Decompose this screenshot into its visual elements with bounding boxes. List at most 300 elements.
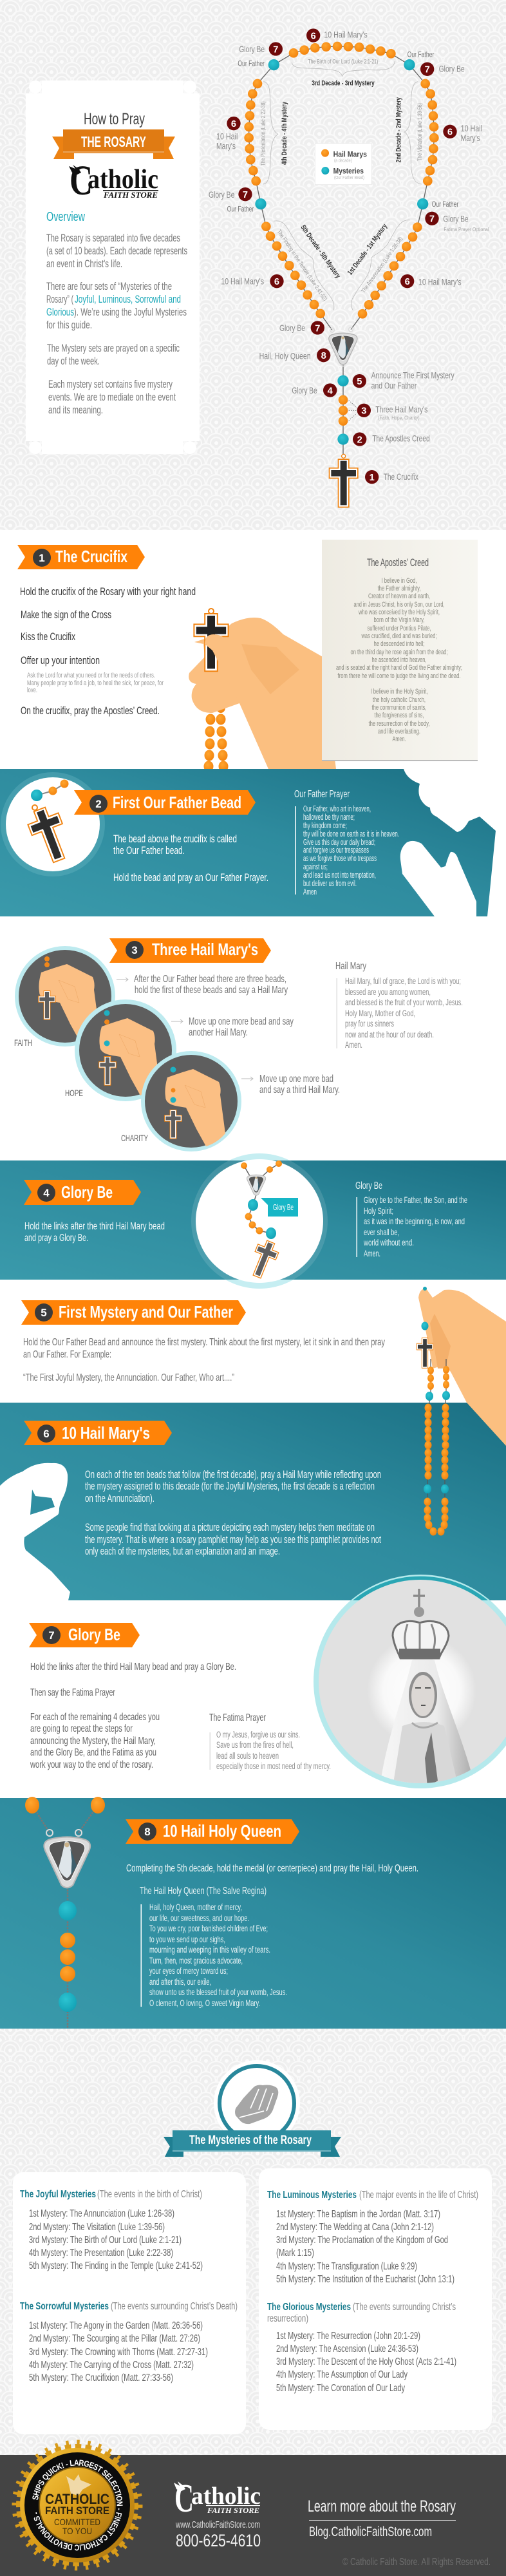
logo: Catholic Faith Store (white) [174, 2477, 261, 2521]
step labels and arrows: Move up one more bead and say [189, 1016, 294, 1027]
Joyful Mysteries list: 1st Mystery: The Annunciation (Luke 1:26-38) [29, 2208, 174, 2219]
banner: 8 [144, 1826, 151, 1838]
logo: Catholic Faith Store (white): C [174, 2477, 194, 2521]
ribbon: The Mysteries of the Rosary: The Mysteries of the Rosary [189, 2134, 312, 2147]
parchment: Apostles' Creed: the holy catholic Church, [373, 696, 426, 704]
Hail Mary prayer: pray for us sinners [345, 1019, 394, 1028]
marker numbers: 4 [328, 386, 333, 396]
parchment: Apostles' Creed: the forgiveness of sins, [375, 712, 424, 719]
dotted pointer lines [349, 401, 357, 421]
title: How to Pray: How to Pray [84, 110, 145, 128]
mystery labels: The Finding in the Temple (Luke 2:41-52) [276, 229, 328, 302]
logo: Catholic Faith Store (white): atholic [191, 2483, 261, 2510]
step labels and arrows: HOPE [65, 1088, 83, 1098]
Salve Regina prayer: our life, our sweetness, and our hope. [149, 1913, 249, 1923]
banner [24, 1421, 172, 1445]
Salve Regina prayer [140, 1886, 287, 2008]
Luminous Mysteries heading [267, 2190, 478, 2201]
parchment: Apostles' Creed: suffered under Pontius Pilate, [367, 625, 431, 632]
instructions [20, 585, 196, 717]
parchment: Apostles' Creed: he ascended into heaven, [372, 656, 426, 664]
silhouette: praying figure [0, 1463, 70, 1600]
instructions: Kiss the Crucifix [21, 630, 75, 643]
Sorrowful Mysteries list: 1st Mystery: The Agony in the Garden (Matt. 26:36-56) [29, 2320, 203, 2331]
overview text: The Mystery sets are prayed on a specific [47, 343, 180, 354]
Hail Mary prayer: Amen. [345, 1040, 362, 1050]
Luminous Mysteries list: 1st Mystery: The Baptism in the Jordan (Matt. 3:17) [276, 2209, 440, 2220]
diagram labels: Three Hail Mary's [375, 404, 427, 415]
Hail Mary prayer: Hail Mary [335, 961, 366, 972]
diagram labels: Our Father [227, 205, 254, 213]
palm shading [241, 644, 299, 694]
Glorious Mysteries heading: resurrection) [267, 2313, 308, 2324]
Salve Regina prayer: and after this, our exile, [149, 1977, 211, 1987]
Luminous Mysteries list: (Mark 1:15) [276, 2248, 314, 2259]
circle: Faith hand [15, 946, 115, 1046]
circle: Hope hand [75, 999, 176, 1101]
diagram labels: Glory Be [439, 64, 465, 74]
parchment: Apostles' Creed: was crucified, died and was buried; [361, 632, 436, 640]
instructions: Ask the Lord for what you need or for the needs of others. [27, 672, 155, 679]
hand holding crucifix: palm [189, 618, 336, 769]
section 6: 10 Hail Mary's [0, 1421, 381, 1600]
banner [17, 545, 145, 569]
instructions: the Our Father bead. [113, 845, 185, 857]
ribbon: The Mysteries of the Rosary [164, 2130, 341, 2157]
diagram labels: 10 Hail Mary's [418, 276, 462, 287]
Our Father prayer: Amen [303, 887, 317, 896]
overview text: Glorious [46, 307, 74, 318]
banner: Glory Be [68, 1625, 120, 1644]
Sorrowful Mysteries heading: The Sorrowful Mysteries [20, 2301, 109, 2312]
marker numbers: 5 [357, 377, 362, 387]
banner: First Our Father Bead [113, 793, 241, 812]
mystery labels: The Annunciation (Luke 1:26-38) [360, 236, 404, 294]
banner: 10 Hail Mary's [62, 1423, 150, 1443]
Sorrowful Mysteries list: 2nd Mystery: The Scourging at the Pillar (Matt. 27:26) [29, 2333, 200, 2344]
banner [74, 790, 256, 815]
Salve Regina prayer: mourning and weeping in this valley of tears. [149, 1945, 270, 1955]
step labels and arrows: After the Our Father bead there are three beads, [134, 974, 286, 985]
banner [29, 1623, 140, 1647]
instructions: For each of the remaining 4 decades you [30, 1712, 160, 1723]
Our Father prayer: Our Father, who art in heaven, [303, 804, 371, 813]
Joyful Mysteries list [29, 2208, 203, 2271]
reflection text: only each of the mysteries, but an explanation and an image. [85, 1546, 280, 1557]
decade labels: 3rd Decade - 3rd Mystery [312, 80, 375, 88]
diagram labels: The Apostles Creed [372, 433, 430, 444]
Glory Be prayer: as it was in the beginning, is now, and [364, 1217, 465, 1226]
Sorrowful Mysteries heading [20, 2301, 238, 2312]
mystery labels: The Presentation (Luke 2:22-38) [259, 101, 266, 166]
diagram labels: Mary's [216, 141, 236, 151]
section 8: Hail Holy Queen [0, 1797, 506, 2029]
Glorious Mysteries list: 5th Mystery: The Coronation of Our Lady [276, 2383, 405, 2394]
marker numbers: 8 [321, 351, 326, 361]
parchment: Apostles' Creed: Creator of heaven and earth, [368, 592, 430, 600]
seal: Committed to You: FAITH STORE [45, 2505, 109, 2517]
instructions [23, 1337, 385, 1383]
numbered markers [227, 28, 457, 484]
Glory Be prayer [355, 1180, 467, 1258]
banner: Glory Be [61, 1182, 113, 1202]
diagram labels: Our Father [432, 200, 458, 209]
instructions: love. [27, 687, 37, 694]
Luminous Mysteries list [276, 2209, 454, 2285]
decade labels: 1st Decade - 1st Mystery [346, 222, 389, 276]
banner: Three Hail Mary's [152, 940, 258, 959]
instructions: On the crucifix, pray the Apostles’ Creed. [21, 705, 160, 717]
section 1: The Crucifix [17, 540, 478, 772]
instructions: “The First Joyful Mystery, the Annunciation. Our Father, Who art....” [23, 1372, 234, 1383]
banner [21, 1300, 246, 1325]
banner [126, 1819, 299, 1844]
crucifix in hand [193, 609, 229, 672]
Sorrowful Mysteries heading: (The events surrounding Christ’s Death) [111, 2301, 238, 2312]
medallion: Glory Be bead [191, 1153, 328, 1289]
mystery labels [259, 59, 423, 302]
reflection text [85, 1469, 381, 1557]
mystery beads [255, 59, 428, 445]
Joyful Mysteries heading: (The events in the birth of Christ) [97, 2189, 202, 2200]
diagram labels: Fatima Prayer Optional [444, 226, 489, 232]
Salve Regina prayer: To you we cry, poor banished children of Eve; [149, 1924, 268, 1933]
Glorious Mysteries list: 1st Mystery: The Resurrection (John 20:1-29) [276, 2331, 420, 2342]
Joyful Mysteries list: 5th Mystery: The Finding in the Temple (Luke 2:41-52) [29, 2260, 203, 2271]
centerpiece medal [329, 333, 357, 365]
panel: Luminous and Glorious Mysteries [259, 2168, 492, 2430]
marker numbers: 7 [425, 65, 430, 75]
ribbon: The Rosary [52, 129, 175, 159]
marker numbers: 6 [405, 277, 410, 287]
Glory Be prayer: Holy Spirit; [364, 1206, 393, 1216]
banner: The Crucifix [55, 547, 127, 566]
instructions: an Our Father. For Example: [23, 1349, 111, 1360]
Glorious Mysteries list: 4th Mystery: The Assumption of Our Lady [276, 2369, 408, 2380]
Our Father prayer: against us; [303, 862, 328, 871]
hand holding rosary [417, 1287, 506, 1535]
teal band [0, 1160, 506, 1280]
instructions: announcing the Mystery, the Hail Mary, [30, 1736, 156, 1747]
Luminous Mysteries list: 4th Mystery: The Transfiguration (Luke 9:29) [276, 2261, 417, 2272]
parchment: Apostles' Creed: I believe in the Holy Spirit, [371, 688, 427, 696]
banner [109, 938, 271, 963]
parchment: Apostles' Creed: and life everlasting. [378, 728, 420, 735]
seal: Committed to You: SHIPS QUICK! - LARGEST SELECTION - FINEST CATHOLIC DEVOTIONALS - [32, 2460, 123, 2550]
ribbon: The Rosary: THE ROSARY [81, 133, 146, 150]
blog link: Blog.CatholicFaithStore.com [309, 2524, 432, 2539]
diagram labels: 10 Hail Mary's [221, 276, 264, 287]
Salve Regina prayer: to you we send up our sighs, [149, 1935, 225, 1944]
top patterned background [0, 0, 506, 530]
banner: 2 [95, 798, 102, 810]
section 6 band [0, 1403, 506, 1600]
callout: Glory Be: Glory Be [273, 1202, 294, 1212]
overview text: Joyful, Luminous, Sorrowful and [75, 294, 181, 305]
diagram labels [209, 29, 489, 482]
marker numbers: 7 [315, 323, 320, 334]
Our Father prayer: Give us this day our daily bread; [303, 838, 375, 847]
instructions: Many people pray to find a job, to heal the sick, for peace, for [27, 679, 164, 687]
overview text: events. We are to mediate on the event [48, 392, 176, 403]
mystery labels: The Birth of Our Lord (Luke 2:1-21) [308, 59, 378, 65]
Fatima prayer: O my Jesus, forgive us our sins. [216, 1730, 300, 1739]
Hail Mary prayer: Holy Mary, Mother of God, [345, 1009, 415, 1018]
diagram labels: Glory Be [209, 189, 234, 200]
marker numbers: 6 [447, 128, 453, 138]
finger shade [430, 1314, 451, 1368]
marker numbers: 6 [231, 119, 236, 129]
parchment: Apostles' Creed: born of the Virgin Mary, [373, 616, 425, 624]
logo: Catholic Faith Store: atholic [88, 165, 158, 194]
diagram labels: Our Father [408, 50, 434, 59]
rosary centerpiece and beads [25, 1797, 105, 2029]
Luminous Mysteries heading: The Luminous Mysteries [267, 2190, 357, 2201]
diagram labels: 10 Hail [461, 123, 482, 133]
Salve Regina prayer: show unto us the blessed fruit of your womb, Jesus. [149, 1987, 287, 1997]
overview text: There are four sets of “Mysteries of the [46, 281, 172, 292]
banner: 4 [43, 1187, 50, 1199]
logo: Catholic Faith Store: C [70, 157, 93, 204]
teal band with praying silhouette cut-out [0, 769, 496, 916]
decade labels [281, 80, 402, 280]
marker numbers: 6 [274, 277, 279, 287]
Joyful Mysteries heading [20, 2189, 202, 2200]
diagram labels: and Our Father [371, 381, 417, 391]
marker numbers: 7 [429, 214, 435, 225]
Our Father prayer [294, 789, 399, 896]
phone: 800-625-4610 [176, 2531, 261, 2550]
banner: 6 [43, 1428, 50, 1440]
Hail Mary prayer: now and at the hour of our death. [345, 1030, 434, 1039]
section 4: Glory Be [0, 1153, 506, 1289]
hand [418, 1289, 506, 1446]
instructions: Hold the links after the third Hail Mary bead [24, 1221, 165, 1232]
crucifix [329, 454, 359, 507]
mystery labels: The Visitation (Luke 1:39-56) [417, 103, 423, 161]
Hail Mary prayer [335, 961, 463, 1050]
overview text: Rosary” ( [46, 294, 73, 305]
silhouette gap between arm and body [30, 1490, 55, 1515]
teal band [0, 1798, 506, 2029]
Salve Regina prayer: O clement, O loving, O sweet Virgin Mary. [149, 1998, 260, 2008]
panel: Joyful and Sorrowful Mysteries [13, 2172, 246, 2434]
instructions: Make the sign of the Cross [21, 609, 111, 621]
hanging rosary strands [417, 1321, 450, 1535]
legend [315, 144, 371, 185]
parchment: Apostles' Creed: and in Jesus Christ, his only Son, our Lord, [354, 601, 444, 609]
parchment: Apostles' Creed: Amen. [393, 735, 406, 743]
step labels and arrows [14, 974, 340, 1143]
step labels and arrows: FAITH [14, 1037, 32, 1048]
overview text: and its meaning. [48, 404, 103, 416]
marker numbers: 3 [361, 406, 366, 417]
diagram labels: Glory Be [443, 213, 469, 223]
decade labels: 4th Decade - 4th Mystery [281, 101, 288, 165]
footer [0, 2439, 506, 2576]
parchment: Apostles' Creed: I believe in God, [381, 577, 417, 585]
diagram labels: Mary's [461, 133, 480, 143]
parchment: Apostles' Creed: on the third day he rose again from the dead; [350, 649, 448, 656]
marker numbers: 7 [243, 190, 248, 200]
logo: Catholic Faith Store [69, 157, 158, 204]
medallion: first bead [1, 772, 105, 876]
Sorrowful Mysteries list: 5th Mystery: The Crucifixion (Matt. 27:33-56) [29, 2372, 173, 2383]
parchment: Apostles' Creed: The Apostles’ Creed [367, 556, 429, 569]
Our Father prayer: but deliver us from evil. [303, 879, 357, 888]
Hail Mary beads [244, 42, 439, 426]
marker numbers [231, 31, 453, 483]
banner [24, 1180, 141, 1205]
instructions: Hold the links after the third Hail Mary bead and pray a Glory Be. [30, 1662, 236, 1672]
logo: Catholic Faith Store (white): FAITH STORE [207, 2506, 259, 2515]
medallion: statue of Our Lady of Fatima [314, 1575, 506, 1788]
diagram labels: Glory Be [292, 385, 317, 395]
Fatima prayer: lead all souls to heaven [216, 1751, 279, 1761]
instructions: and pray a Glory Be. [24, 1233, 88, 1244]
instructions: Hold the bead and pray an Our Father Prayer. [113, 872, 268, 884]
instructions: Hold the crucifix of the Rosary with your right hand [20, 585, 196, 598]
Fatima prayer: Save us from the fires of hell, [216, 1740, 294, 1750]
legend: Hail Marys [333, 149, 367, 158]
Glory Be prayer: world without end. [363, 1238, 414, 1247]
Glory Be prayer: Glory Be [355, 1180, 382, 1191]
parchment: Apostles' Creed: who was conceived by the Holy Spirit, [358, 609, 440, 616]
banner: First Mystery and Our Father [59, 1302, 233, 1321]
marker numbers: 2 [357, 435, 362, 445]
banner: 7 [48, 1629, 55, 1642]
diagram labels: Announce The First Mystery [371, 370, 454, 380]
seal: Committed to You: COMMITTED [54, 2517, 100, 2527]
Fatima prayer: The Fatima Prayer [209, 1712, 266, 1723]
seal: Committed to You: TO YOU [62, 2526, 92, 2536]
parchment: Apostles' Creed: the communion of saints, [372, 704, 426, 712]
section 2: First Our Father Bead [0, 769, 496, 916]
Fatima prayer: especially those in most need of thy mercy. [216, 1761, 331, 1771]
decade labels: 5th Decade - 5th Mystery [299, 223, 342, 280]
section 5: First Mystery and Our Father [21, 1300, 385, 1383]
legend: (Our Father Bead) [334, 175, 364, 180]
diagram labels: 10 Hail [216, 131, 238, 142]
parchment: Apostles' Creed: the Father almighty, [377, 585, 421, 592]
parchment: Apostles' Creed: he descended into hell; [373, 640, 425, 648]
Glory Be prayer: Amen. [364, 1249, 380, 1258]
seal: Committed to You [12, 2439, 143, 2571]
diagram labels: Glory Be [279, 323, 305, 333]
instructions: Offer up your intention [21, 654, 100, 667]
overview text: an event in Christ's life. [46, 258, 122, 270]
Joyful Mysteries heading: The Joyful Mysteries [20, 2189, 96, 2200]
circle: Charity hand [141, 1051, 241, 1151]
braces [263, 61, 422, 310]
overview text [46, 232, 187, 416]
Our Father prayer: as we forgive those who trespass [303, 854, 377, 863]
legend: (a decade) [334, 157, 352, 163]
seal: Committed to You: CATHOLIC [45, 2491, 109, 2507]
diagram labels: 10 Hail Mary's [324, 29, 368, 39]
parchment: Apostles' Creed: the resurrection of the body, [368, 720, 430, 728]
marker numbers: 6 [311, 31, 316, 41]
Salve Regina prayer: Turn, then, most gracious advocate, [149, 1956, 243, 1965]
panel: overview card [26, 80, 200, 454]
overview text: (a set of 10 beads). Each decade represents [46, 245, 187, 257]
instructions: The bead above the crucifix is called [113, 833, 237, 845]
heading: Overview: Overview [46, 210, 85, 224]
legend: Mysteries [333, 166, 364, 175]
rosary diagram [209, 28, 489, 507]
decade labels: 2nd Decade - 2nd Mystery [395, 97, 402, 162]
Joyful Mysteries list: 2nd Mystery: The Visitation (Luke 1:39-56) [29, 2222, 165, 2233]
Our Father prayer: Our Father Prayer [294, 789, 350, 800]
diagram labels: The Crucifix [384, 471, 418, 482]
Joyful Mysteries list: 4th Mystery: The Presentation (Luke 2:22-38) [29, 2248, 173, 2259]
Sorrowful Mysteries list: 4th Mystery: The Carrying of the Cross (Matt. 27:32) [29, 2360, 194, 2371]
Salve Regina prayer: The Hail Holy Queen (The Salve Regina) [140, 1886, 267, 1897]
Fatima prayer [209, 1712, 331, 1771]
step labels and arrows: Move up one more bad [259, 1074, 333, 1084]
parchment: Apostles' Creed [322, 540, 478, 761]
Glorious Mysteries heading [267, 2302, 456, 2324]
Salve Regina prayer: Hail, holy Queen, mother of mercy, [149, 1902, 242, 1912]
callout: Glory Be [261, 1198, 298, 1217]
step labels and arrows: CHARITY [121, 1133, 148, 1143]
Sorrowful Mysteries list: 3rd Mystery: The Crowning with Thorns (Matt. 27:27-31) [29, 2347, 208, 2358]
diagram labels: Our Father [238, 59, 265, 68]
instructions [113, 833, 268, 884]
thumb [205, 634, 283, 769]
Our Father prayer: hallowed be thy name; [303, 813, 355, 822]
instructions [30, 1662, 236, 1770]
step labels and arrows: and say a third Hail Mary. [259, 1084, 340, 1095]
Our Father prayer: and forgive us our trespasses [303, 846, 369, 855]
instructions: and the Glory Be, and the Fatima as you [30, 1747, 156, 1758]
Our Father prayer: thy kingdom come; [303, 821, 347, 830]
overview text: The Rosary is separated into five decades [46, 232, 180, 244]
website: www.CatholicFaithStore.com [175, 2519, 260, 2530]
step labels and arrows: another Hail Mary. [189, 1027, 248, 1038]
rosary chain [249, 46, 434, 455]
lower patterned background [0, 2029, 506, 2455]
thumb nail bead [423, 1287, 427, 1291]
diagram labels: Hail, Holy Queen [259, 350, 311, 361]
overview text: for this guide. [46, 319, 92, 331]
instructions: work your way to the end of the rosary. [30, 1759, 153, 1770]
section 7: Glory Be [29, 1623, 331, 1771]
section 3: Three Hail Mary's [14, 938, 463, 1151]
logo: Catholic Faith Store: FAITH STORE [103, 190, 158, 200]
overview text: ). We’re using the Joyful Mysteries [74, 307, 187, 318]
Joyful Mysteries list: 3rd Mystery: The Birth of Our Lord (Luke 2:1-21) [29, 2235, 182, 2246]
Luminous Mysteries list: 2nd Mystery: The Wedding at Cana (John 2:1-12) [276, 2222, 434, 2233]
rings [330, 327, 353, 366]
Our Father prayer: and lead us not into temptation, [303, 871, 376, 880]
icon: praying hands medallion [214, 2060, 300, 2146]
reflection text: Some people find that looking at a picture depicting each mystery helps them meditate on [85, 1522, 375, 1533]
instructions [24, 1221, 165, 1244]
Hail Mary prayer: blessed are you among women, [345, 987, 431, 997]
banner: 3 [131, 944, 138, 956]
marker numbers: 1 [370, 473, 375, 483]
instructions: are going to repeat the steps for [30, 1723, 133, 1734]
overview text: Each mystery set contains five mystery [48, 379, 173, 390]
reflection text: on the Annunciation). [85, 1493, 155, 1504]
Glorious Mysteries heading: (The events surrounding Christ’s [353, 2302, 456, 2313]
marker numbers: 7 [273, 44, 278, 55]
Glorious Mysteries list [276, 2331, 456, 2394]
Glorious Mysteries list: 2nd Mystery: The Ascension (Luke 24:36-53) [276, 2344, 418, 2354]
Glorious Mysteries heading: The Glorious Mysteries [267, 2302, 351, 2313]
overview text: day of the week. [47, 355, 100, 367]
